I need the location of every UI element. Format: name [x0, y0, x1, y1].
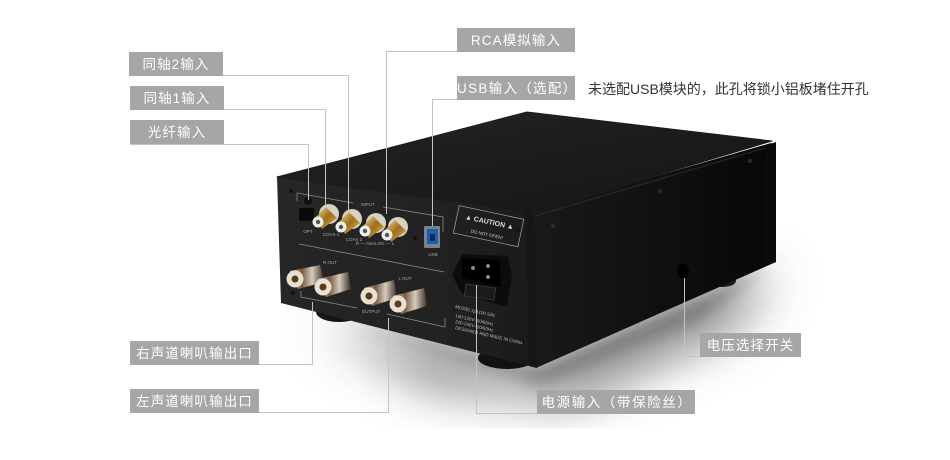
- chassis rear panel: [277, 177, 537, 368]
- connector captions: OUTPUT: [362, 309, 380, 314]
- model and rating text: [455, 304, 523, 346]
- label: RCA analog input: [457, 28, 575, 52]
- connector captions: OPT: [303, 229, 313, 234]
- label: power input with fuse: 电源输入（带保险丝）: [542, 395, 692, 410]
- optical input: [299, 196, 314, 221]
- connector captions: [303, 202, 438, 314]
- label: optical input: [130, 120, 224, 144]
- label: voltage selector switch: 电压选择开关: [707, 338, 794, 353]
- chassis side face: [532, 143, 776, 368]
- caution plate: ▲ CAUTION ▲: [464, 214, 514, 231]
- side edge highlight and end cap: [289, 142, 776, 368]
- label: optical input: 光纤输入: [148, 125, 206, 140]
- label: coaxial 2 input: [129, 52, 223, 76]
- input section bracket lines: [297, 193, 445, 327]
- connector captions: R — ANALOG — L: [356, 241, 395, 246]
- speaker binding posts: [286, 265, 427, 314]
- connector captions: COAX 1: [323, 232, 340, 237]
- label: USB input optional: [457, 76, 575, 100]
- floor shadow: [320, 265, 775, 400]
- model and rating text: MODEL:QA100 S/N:: [455, 304, 496, 318]
- label: voltage selector switch: [700, 333, 801, 357]
- power inlet with fuse: [452, 254, 512, 307]
- product illustration: amplifier rear view: [130, 51, 788, 428]
- label: power input with fuse: [537, 390, 695, 414]
- label: right channel speaker output: [130, 341, 259, 365]
- model and rating text: DESIGNED AND MADE IN CHINA: [455, 325, 523, 346]
- label: left channel speaker output: 左声道喇叭输出口: [136, 394, 253, 409]
- leader lines: [130, 52, 700, 414]
- connector captions: L OUT: [398, 276, 412, 281]
- label: coaxial 1 input: [130, 86, 224, 110]
- caution plate: [453, 206, 524, 247]
- model and rating text: 220-240V~50/60Hz: [455, 319, 495, 333]
- label: left channel speaker output: [130, 389, 259, 413]
- label: USB input optional: USB输入（选配）: [457, 81, 577, 96]
- chassis top face: [277, 112, 772, 213]
- connector captions: INPUT: [361, 202, 375, 207]
- model and rating text: 100-120V~50/60Hz: [455, 313, 495, 327]
- feet: [316, 275, 736, 369]
- RCA connectors: [312, 204, 408, 242]
- caution plate: DO NOT OPEN!: [470, 229, 503, 240]
- label: right channel speaker output: 右声道喇叭输出口: [136, 346, 253, 361]
- label: coaxial 1 input: 同轴1输入: [143, 91, 210, 106]
- USB port: [424, 226, 440, 248]
- label: RCA analog input: RCA模拟输入: [471, 33, 561, 48]
- voltage switch hole: [677, 264, 689, 278]
- connector captions: COAX 2: [346, 237, 363, 242]
- connector captions: USB: [428, 252, 438, 257]
- connector captions: R OUT: [323, 260, 337, 265]
- label: coaxial 2 input: 同轴2输入: [142, 57, 210, 72]
- note: USB module: 未选配USB模块的，此孔将锁小铝板堵住开孔: [588, 81, 869, 97]
